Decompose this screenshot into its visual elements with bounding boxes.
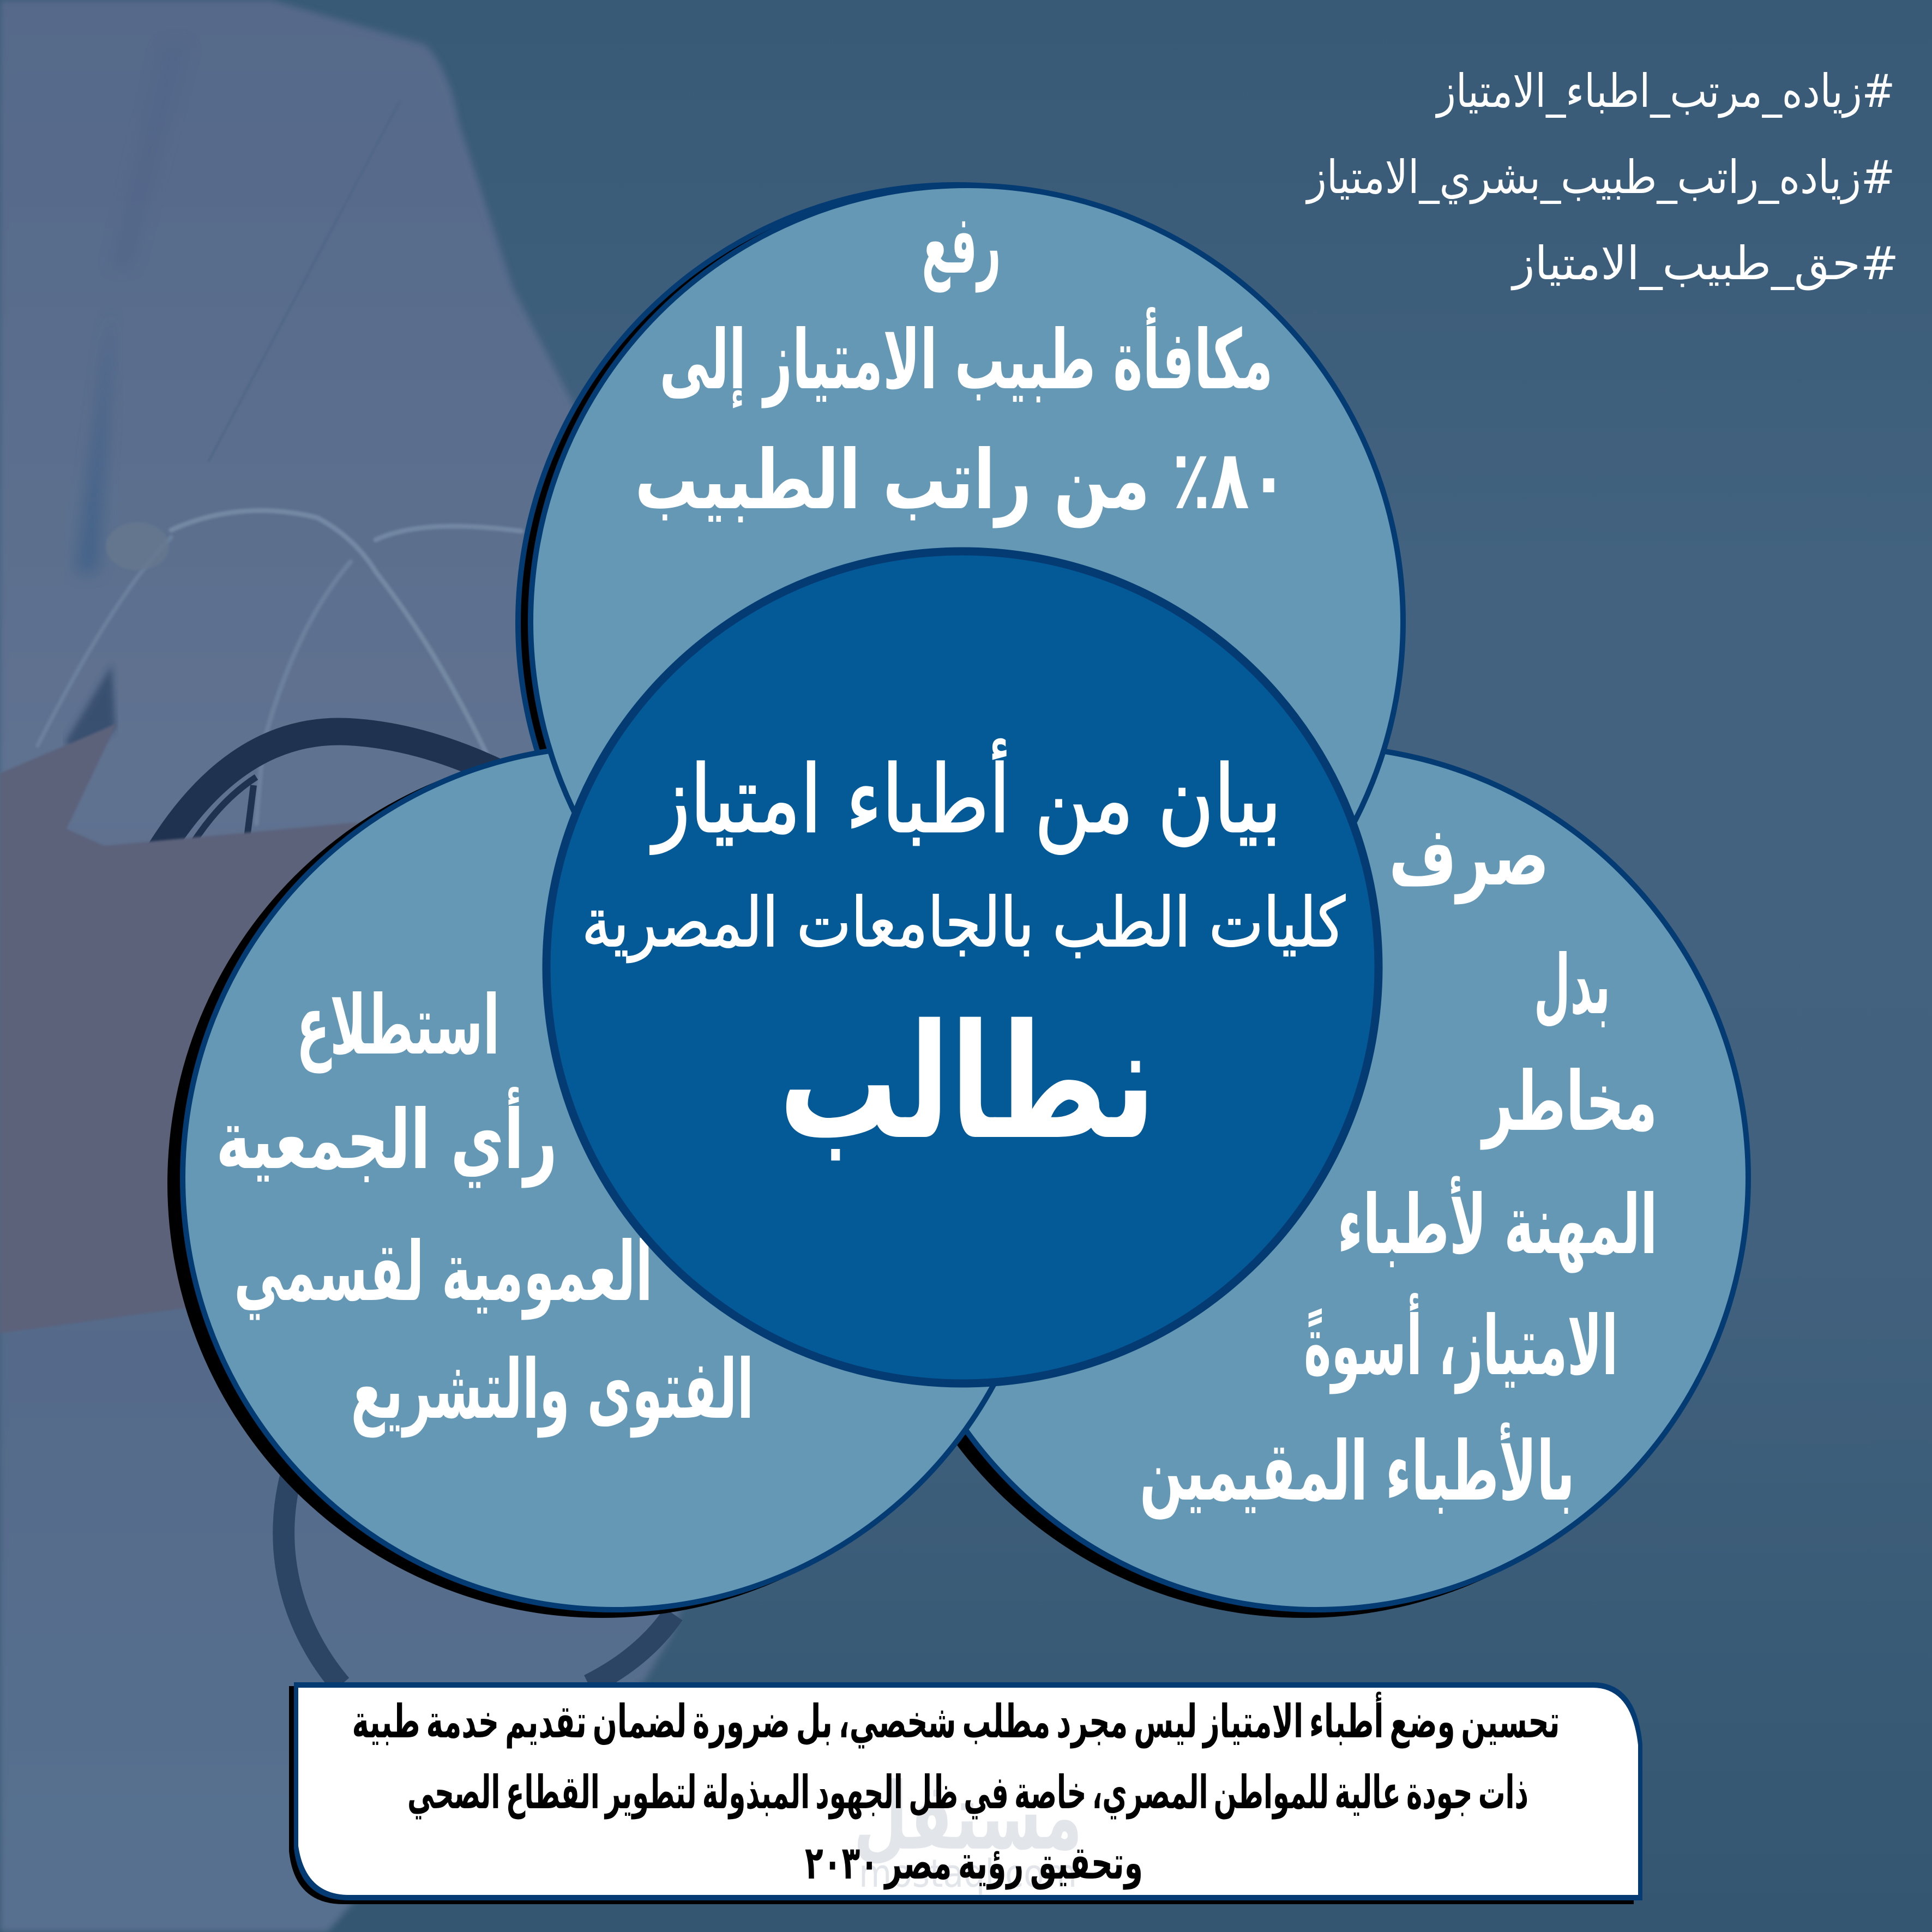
hashtags: #حق_طبيب_الامتياز [1510,237,1899,291]
center title: we demand: نطالب [779,991,1156,1175]
left circle text: رأي الجمعية [216,1087,557,1188]
watermark: mostaql.com [859,1851,1077,1896]
right circle text [1140,809,1658,1520]
right circle text: الامتياز، أسوةً [1304,1293,1618,1394]
hashtags [1305,64,1899,291]
top circle text: رفع [922,197,1001,293]
right circle text: مخاطر [1480,1055,1658,1150]
watermark: مستقل [853,1763,1082,1871]
left circle text: الفتوى والتشريع [351,1343,754,1438]
right circle text: صرف [1389,809,1549,905]
bottom callout box [289,1682,1642,1904]
right circle text: بالأطباء المقيمين [1140,1422,1575,1520]
left circle text [216,978,754,1438]
right circle: pay profession hazard allowance [869,746,1748,1618]
background photo: doctor with stethoscope [0,0,709,1932]
top circle text: مكافأة طبيب الامتياز إلى [660,307,1273,408]
top circle shadow [518,185,1394,1061]
right circle text: بدل [1534,938,1610,1033]
callout text: وتحقيق رؤية مصر ٢٠٣٠ [805,1836,1143,1890]
right circle text: المهنة لأطباء [1337,1176,1658,1273]
center heading: بيان من أطباء امتياز [649,739,1281,854]
left circle text: استطلاع [297,978,499,1074]
center subheading: كليات الطب بالجامعات المصرية [582,883,1345,963]
top circle: raise the intern's stipend [531,185,1403,1058]
top circle text [635,197,1288,528]
callout text [352,1692,1560,1890]
left circle text: العمومية لقسمي [234,1225,653,1320]
center circle [546,551,1379,1383]
watermark [853,1763,1082,1896]
top circle text: ٨٠٪ من راتب الطبيب [635,433,1288,528]
left circle: poll the opinion of the general assembly [167,746,1046,1618]
